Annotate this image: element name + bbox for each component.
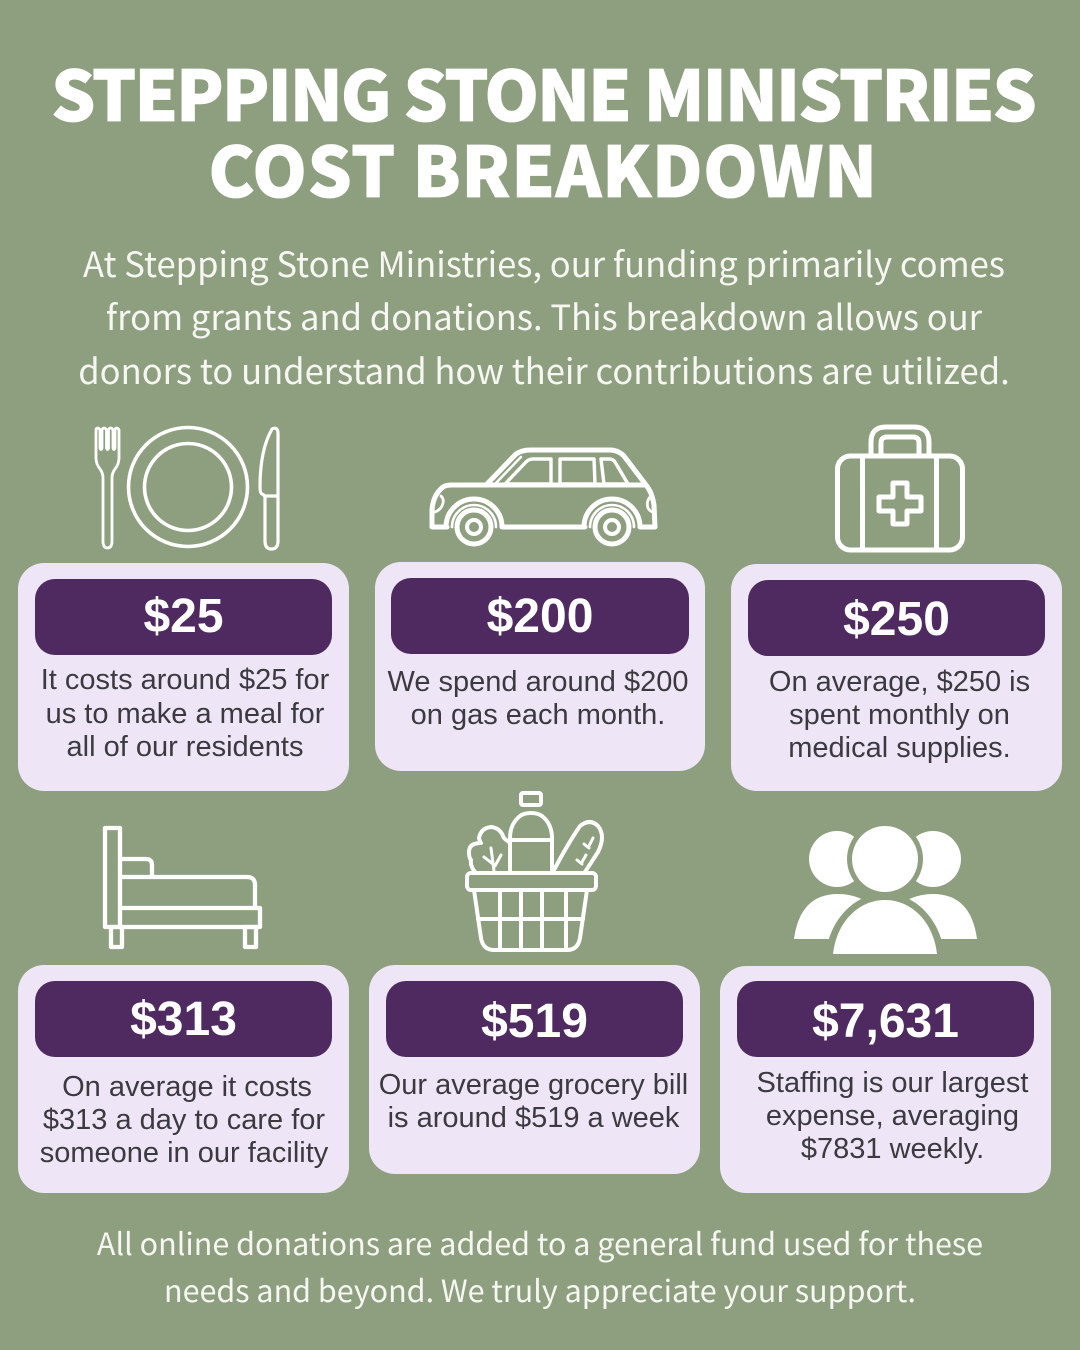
amount: $250 bbox=[748, 580, 1045, 656]
amount: $250: $250 bbox=[843, 593, 950, 646]
intro paragraph: from grants and donations. This breakdown allows our bbox=[106, 290, 982, 340]
title bbox=[51, 41, 1035, 218]
intro paragraph: donors to understand how their contributions are utilized. bbox=[78, 344, 1010, 394]
description: medical bbox=[769, 666, 1030, 764]
icon: bed bbox=[102, 826, 262, 950]
amount: $313: $313 bbox=[130, 993, 237, 1046]
description: gas: We spend around $200 bbox=[388, 666, 688, 698]
intro paragraph bbox=[78, 237, 1010, 394]
amount: $200: $200 bbox=[487, 590, 593, 643]
description: daily care: On average it costs bbox=[62, 1071, 312, 1103]
description: grocery: is around $519 a week bbox=[388, 1102, 679, 1134]
description: medical: spent monthly on bbox=[789, 699, 1010, 731]
footer note: All online donations are added to a general fund used for these bbox=[97, 1220, 983, 1264]
footer note bbox=[97, 1220, 983, 1311]
description: meal: It costs around $25 for bbox=[41, 664, 329, 696]
description: daily care: someone in our facility bbox=[40, 1137, 328, 1169]
description: meal bbox=[41, 664, 329, 763]
description: gas: on gas each month. bbox=[411, 699, 665, 731]
icon: car bbox=[430, 448, 658, 546]
description: grocery bbox=[379, 1069, 688, 1134]
card: $25 meal bbox=[18, 563, 349, 791]
description: staffing: $7831 weekly. bbox=[801, 1133, 984, 1165]
title: STEPPING STONE MINISTRIES bbox=[51, 41, 1035, 142]
amount: $200 bbox=[391, 578, 689, 654]
description: meal: all of our residents bbox=[67, 731, 303, 763]
description: staffing: Staffing is our largest bbox=[757, 1067, 1028, 1099]
description: grocery: Our average grocery bill bbox=[379, 1069, 688, 1101]
description: daily care bbox=[40, 1071, 328, 1169]
icon: first aid kit bbox=[835, 424, 965, 552]
description: medical: medical supplies. bbox=[788, 732, 1011, 764]
card: $313 daily care bbox=[18, 965, 349, 1193]
footer note: needs and beyond. We truly appreciate your support. bbox=[164, 1267, 916, 1311]
amount: $519 bbox=[386, 981, 683, 1057]
icon: fork, plate and knife bbox=[94, 426, 280, 551]
description: staffing: expense, averaging bbox=[766, 1100, 1019, 1132]
description: staffing bbox=[757, 1067, 1028, 1165]
amount: $25: $25 bbox=[143, 590, 224, 643]
amount: $7,631 bbox=[737, 981, 1034, 1057]
amount: $519: $519 bbox=[481, 995, 588, 1048]
amount: $313 bbox=[35, 981, 332, 1057]
icon: grocery basket bbox=[465, 791, 604, 952]
description: daily care: $313 a day to care for bbox=[43, 1104, 325, 1136]
description: meal: us to make a meal for bbox=[46, 698, 324, 730]
title: COST BREAKDOWN bbox=[208, 117, 878, 218]
card: $200 gas bbox=[375, 562, 705, 771]
card: $519 grocery bbox=[369, 965, 700, 1174]
card: $250 medical bbox=[731, 564, 1062, 791]
card: $7,631 staffing bbox=[720, 966, 1051, 1193]
intro paragraph: At Stepping Stone Ministries, our funding primarily comes bbox=[83, 237, 1005, 287]
description: gas bbox=[388, 666, 688, 731]
description: medical: On average, $250 is bbox=[769, 666, 1030, 698]
icon: group of people bbox=[794, 826, 977, 954]
amount: $25 bbox=[35, 579, 332, 655]
amount: $7,631: $7,631 bbox=[812, 995, 959, 1048]
